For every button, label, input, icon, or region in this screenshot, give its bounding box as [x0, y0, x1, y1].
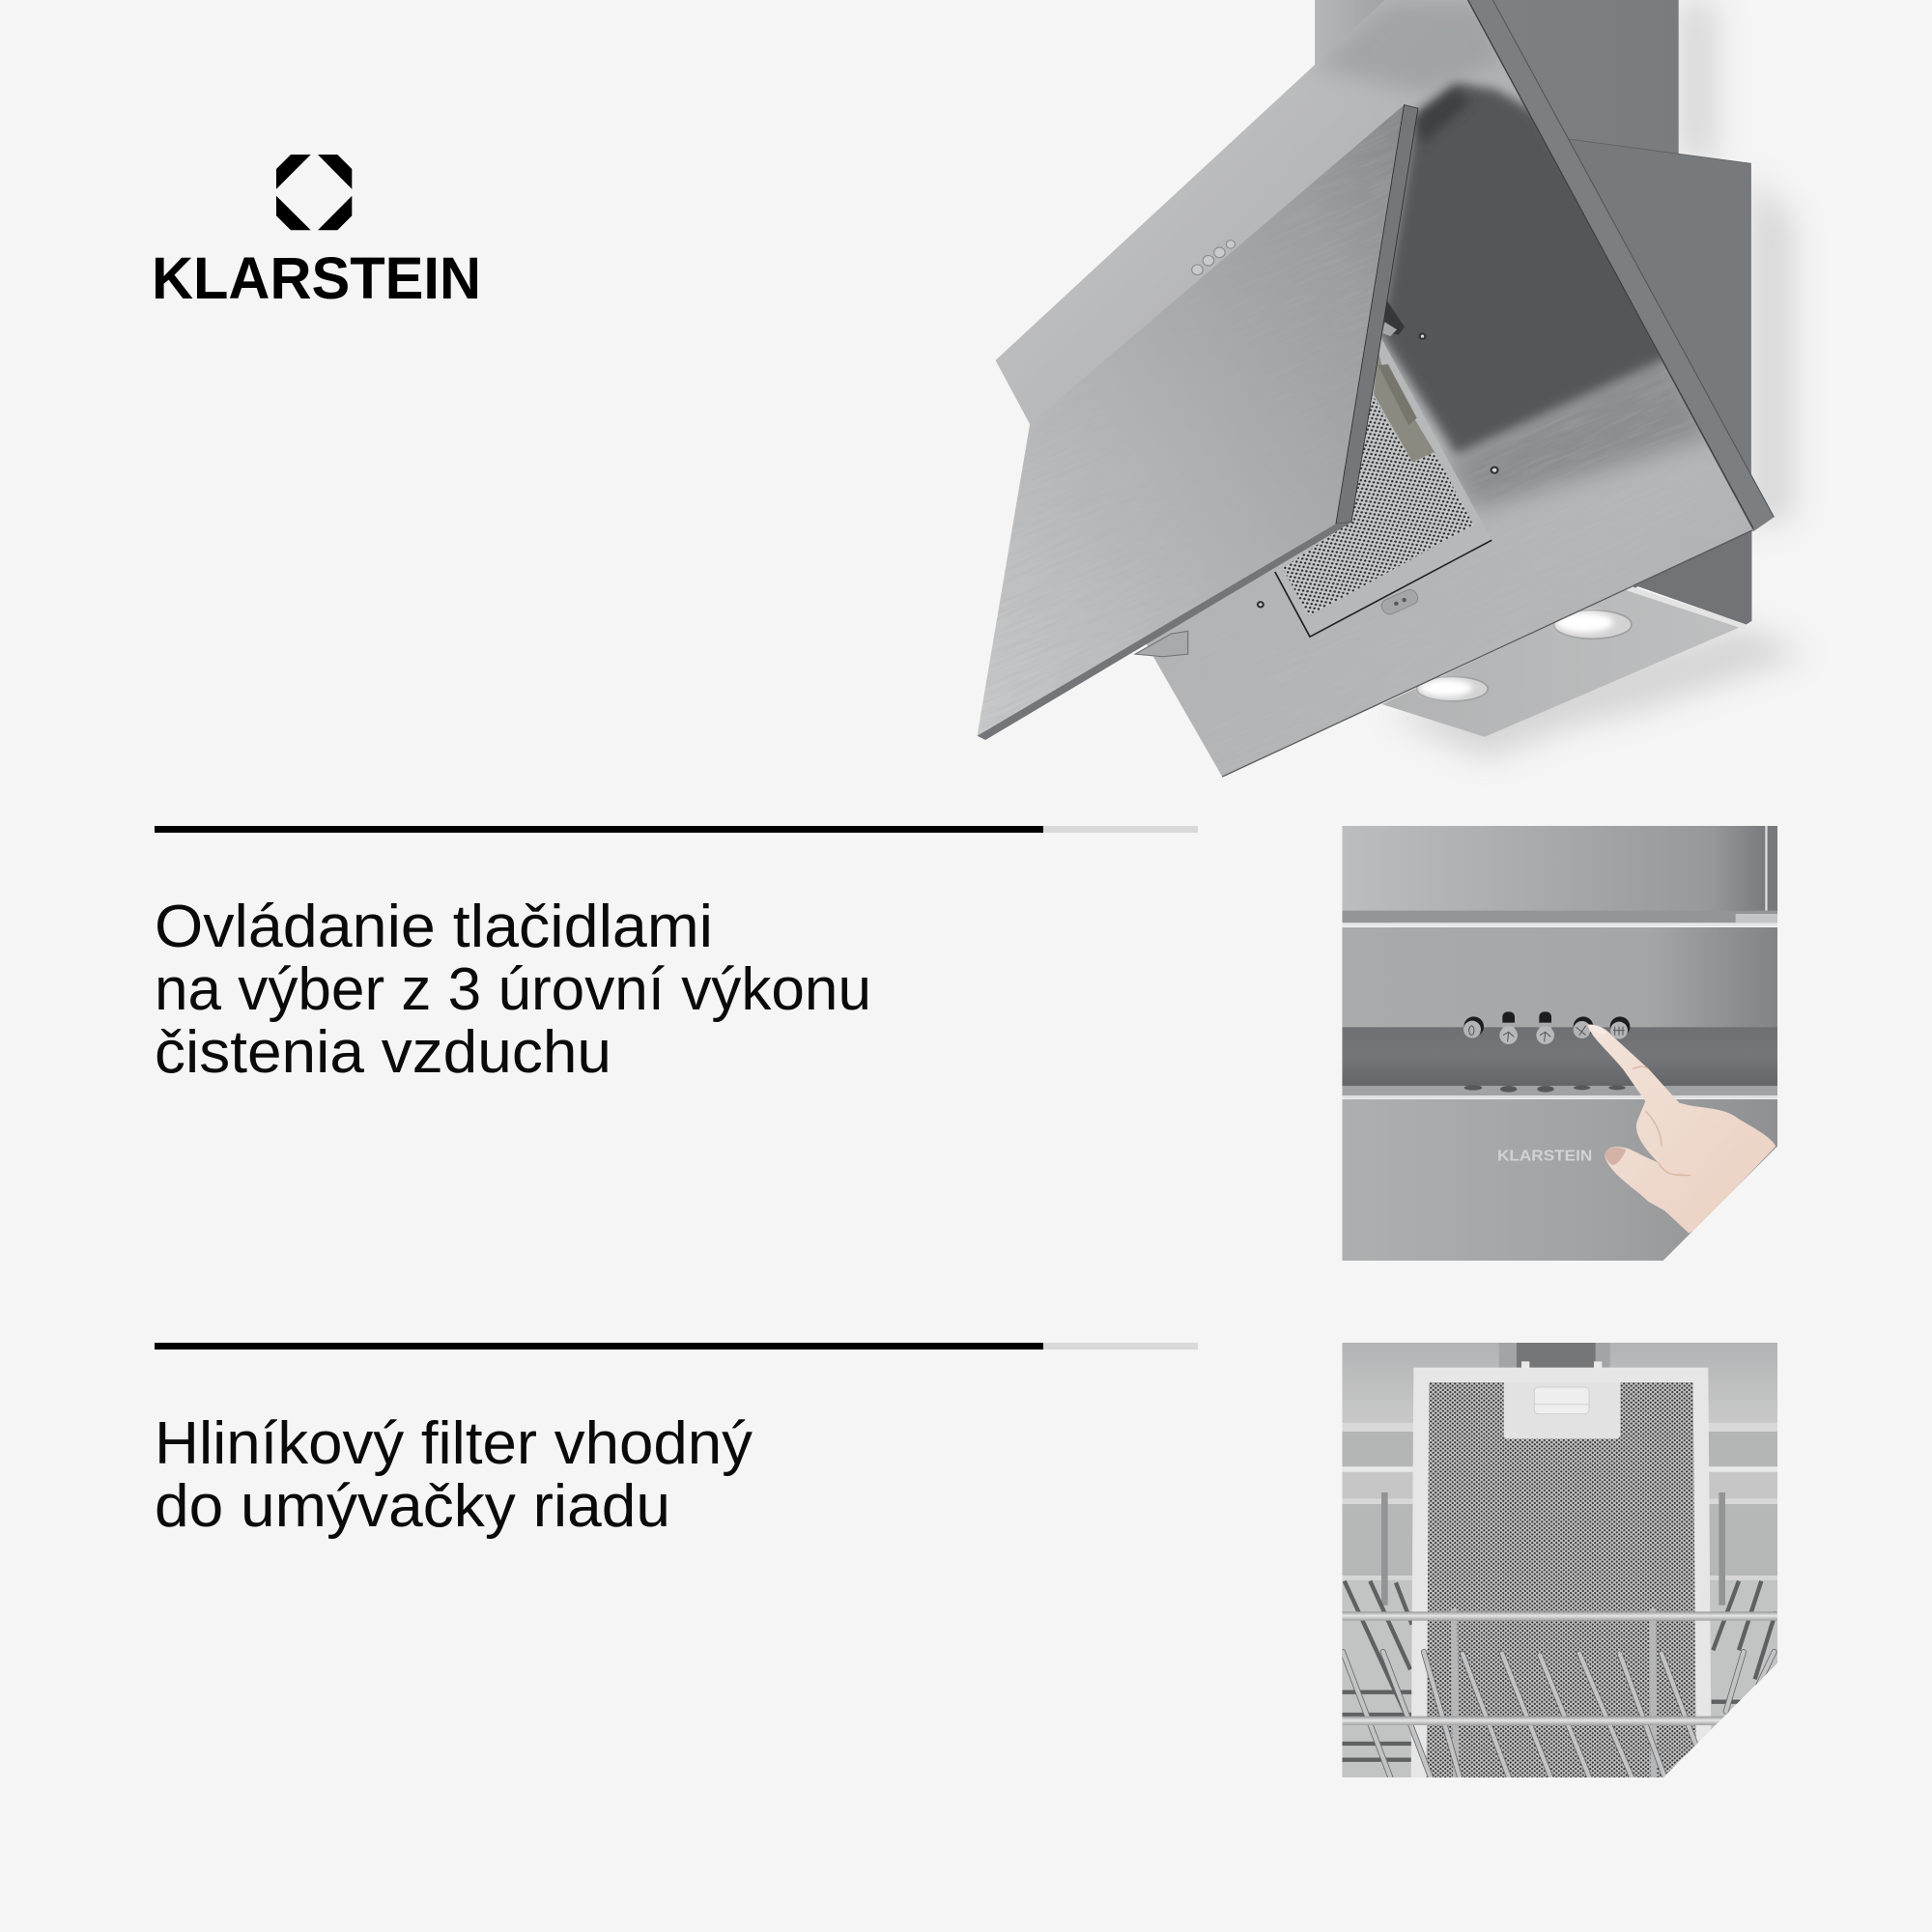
underside box — [1382, 586, 1747, 737]
brushed texture — [1491, 386, 1665, 475]
button reflections — [1464, 1085, 1626, 1093]
filter plate handle — [1378, 364, 1417, 425]
control panel band — [1342, 927, 1777, 1028]
text: section 2 — [155, 1410, 753, 1540]
handle — [1379, 587, 1420, 616]
divider: section 1 — [155, 826, 1198, 833]
side wing — [1568, 139, 1750, 587]
text: section 2: Hliníkový filter vhodný — [155, 1410, 753, 1477]
icon: octagon brand mark — [276, 155, 352, 230]
flap lower edge — [978, 523, 1351, 740]
filter frame — [1411, 1368, 1712, 1777]
text: section 2: do umývačky riadu — [155, 1473, 670, 1540]
upper steel band — [1342, 826, 1777, 911]
product image: extractor hood — [978, 0, 1803, 778]
rack uprights — [1454, 1608, 1654, 1777]
lights — [1417, 611, 1632, 701]
filter tabs — [1521, 1361, 1602, 1368]
hand pressing a button — [1587, 1025, 1776, 1234]
flap edge trim — [1336, 104, 1418, 524]
buttons — [1463, 1011, 1630, 1044]
chimney duct — [1315, 0, 1679, 169]
reflection area — [1313, 0, 1718, 511]
bracket — [1135, 631, 1188, 657]
filter frame lower edge — [1275, 540, 1492, 637]
photo: control buttons — [1342, 826, 1777, 1261]
text: section 1 — [155, 894, 871, 1086]
rear rack wires — [1342, 1581, 1776, 1760]
main panel — [995, 0, 1753, 778]
filter inner plate — [1374, 351, 1435, 462]
button symbols — [1469, 1026, 1625, 1041]
lower panel — [1342, 1099, 1777, 1261]
filter handle plate — [1504, 1382, 1620, 1438]
box front lip — [1626, 586, 1747, 630]
divider: section 2 — [155, 1343, 1198, 1350]
finger creases — [1633, 1066, 1690, 1176]
brushed texture — [1387, 178, 1391, 181]
logo wordmark: KLARSTEIN — [152, 245, 481, 311]
text: section 1: čistenia vzduchu — [155, 1019, 611, 1086]
diagonal trim strip — [1468, 0, 1774, 531]
fingernails — [1588, 1025, 1606, 1034]
panel brand text: KLARSTEIN — [1497, 1148, 1592, 1164]
filter mesh — [1427, 1382, 1696, 1777]
rack tines — [1343, 1652, 1775, 1779]
screws — [1258, 333, 1498, 607]
rack rails — [1342, 1611, 1777, 1725]
control buttons — [1192, 241, 1235, 275]
panel lower edge — [1222, 530, 1753, 777]
logo: Klarstein — [152, 155, 481, 311]
front flap — [978, 104, 1418, 740]
filter mesh — [1283, 394, 1473, 616]
rack tines shadow — [1343, 1652, 1775, 1779]
filter frame — [1275, 338, 1492, 637]
text: section 1: Ovládanie tlačidlami — [155, 894, 713, 960]
text: section 1: na výber z 3 úrovní výkonu — [155, 956, 871, 1023]
dishwasher interior — [1342, 1343, 1777, 1777]
photo: aluminium filter in dishwasher — [1342, 1343, 1777, 1779]
hood shadow — [1390, 0, 1806, 759]
side wall under wing — [1634, 526, 1751, 624]
filter sensor bracket — [1382, 298, 1405, 336]
